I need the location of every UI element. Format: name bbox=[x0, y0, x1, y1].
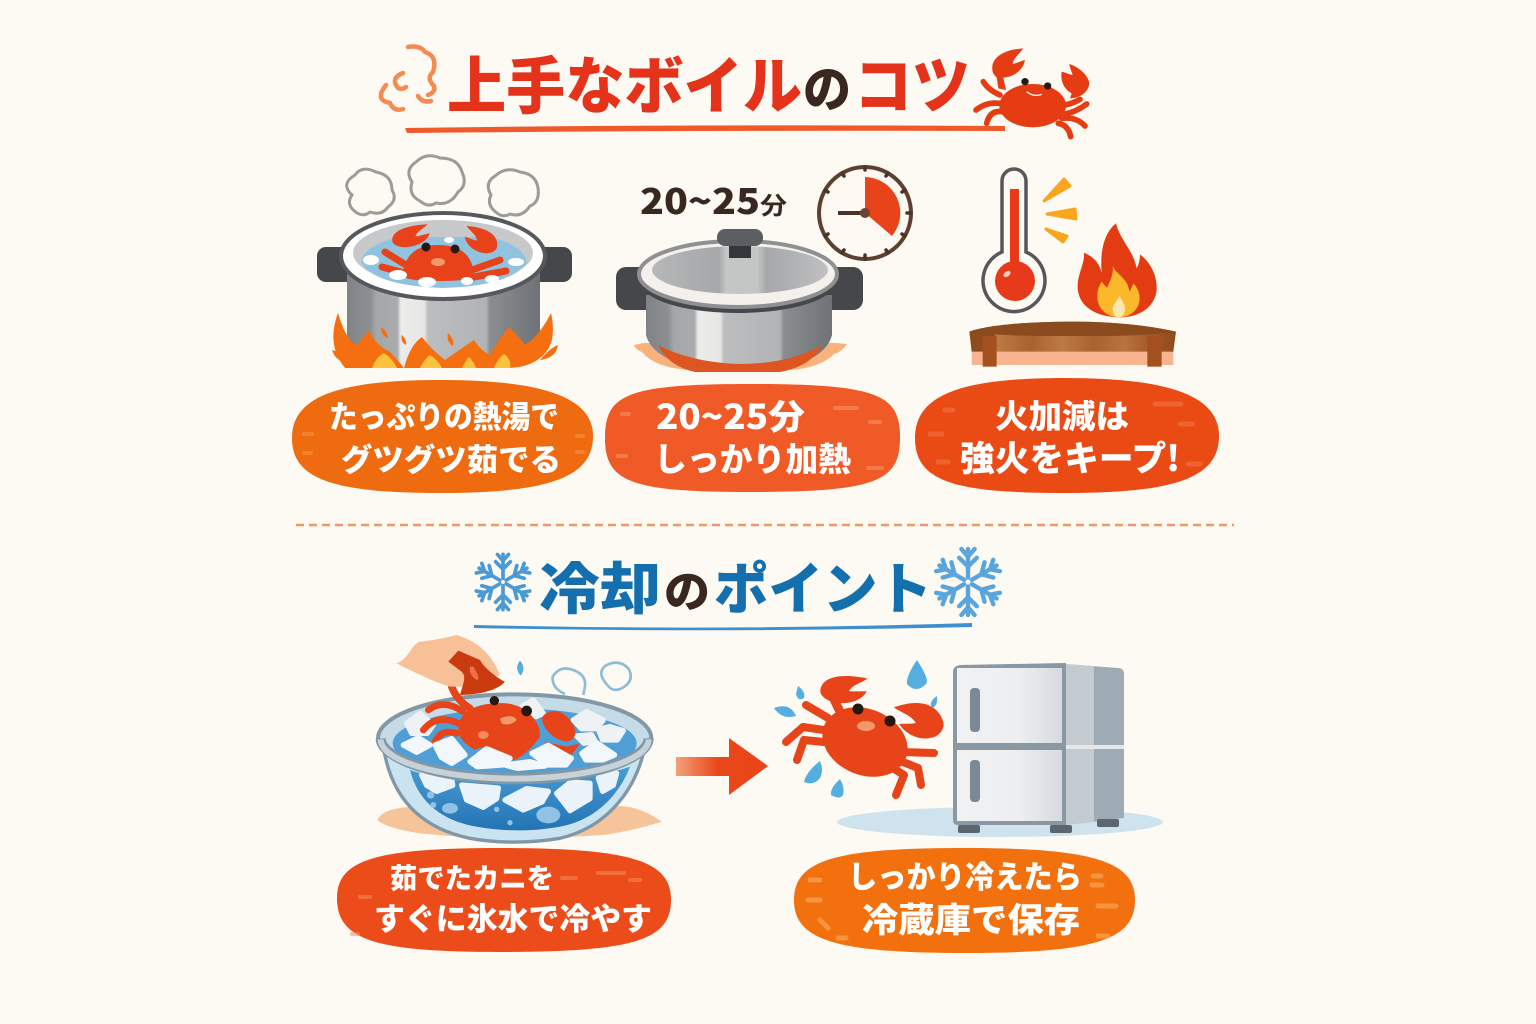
pill: store in fridge bbox=[794, 848, 1135, 953]
cutting board bbox=[969, 322, 1176, 367]
pill: keep strong heat: 火加減は bbox=[995, 390, 1129, 438]
pill: boil in hot water: グツグツ茹でる bbox=[341, 435, 561, 480]
flames bbox=[333, 313, 553, 368]
pill: keep strong heat bbox=[915, 378, 1219, 493]
back rim bbox=[378, 694, 651, 782]
heat rays bbox=[1044, 179, 1076, 242]
steam bbox=[553, 663, 631, 695]
crab in pot bbox=[382, 224, 506, 281]
drop bbox=[517, 661, 523, 676]
icon: timer clock bbox=[819, 167, 911, 259]
illustration: crab in ice bowl bbox=[377, 635, 662, 842]
pot body bbox=[347, 262, 540, 366]
icon: steam swirl beside title bbox=[381, 47, 434, 110]
cold water bbox=[410, 767, 630, 830]
heading: cooling points bbox=[539, 545, 932, 626]
illustration: boiling pot bbox=[317, 156, 572, 368]
handles bbox=[317, 247, 365, 282]
heading: cooling points: の bbox=[664, 556, 710, 620]
lid knob bbox=[717, 229, 763, 258]
heading: cooling points: ポイント bbox=[714, 545, 932, 626]
illustration: covered pot with timer bbox=[616, 229, 863, 372]
thermometer bbox=[983, 169, 1045, 312]
pill: heat 20-25 min: 20~25分 bbox=[656, 390, 805, 439]
pill: cool in ice water bbox=[337, 848, 671, 952]
handles bbox=[970, 688, 980, 732]
pill: heat 20-25 min: しっかり加熱 bbox=[654, 433, 851, 481]
feet bbox=[958, 825, 980, 833]
steam clouds bbox=[347, 156, 538, 216]
heading: boil tips: の bbox=[803, 50, 851, 122]
heading: boil tips: 上手なボイル bbox=[447, 36, 802, 126]
pill: cool in ice water: 茹でたカニを bbox=[390, 857, 554, 897]
orange shadow bbox=[377, 806, 662, 841]
heading: boil tips: コツ bbox=[854, 36, 970, 126]
foam bbox=[363, 237, 524, 287]
water drops bbox=[774, 660, 937, 798]
floor shadow bbox=[837, 807, 1163, 837]
pot body bbox=[646, 295, 832, 368]
pill: heat 20-25 min bbox=[605, 384, 900, 492]
flame bbox=[1078, 223, 1157, 317]
front rim bbox=[381, 738, 649, 778]
pill: store in fridge: しっかり冷えたら bbox=[848, 852, 1082, 897]
label: time: 20~25 分 bbox=[640, 174, 787, 225]
front panel bbox=[953, 663, 1066, 825]
ice under water bbox=[422, 773, 617, 811]
pot rim bbox=[341, 213, 545, 299]
back ice bbox=[407, 700, 623, 743]
illustration: thermometer and flame on board bbox=[969, 169, 1176, 367]
pill: cool in ice water: すぐに氷水で冷やす bbox=[374, 894, 652, 939]
crab bbox=[423, 687, 580, 761]
heading: cooling points: 冷却 bbox=[539, 545, 661, 626]
burner glow bbox=[658, 345, 822, 372]
water bbox=[361, 237, 527, 288]
illustration: wet crab bbox=[774, 660, 948, 798]
icon: crab by title bbox=[976, 48, 1089, 137]
lid rim bbox=[643, 284, 833, 313]
lid dome bbox=[652, 246, 828, 294]
icon: snowflake left bbox=[475, 554, 531, 610]
pill: boil in hot water: たっぷりの熱湯で bbox=[329, 392, 559, 437]
orange heat glow bbox=[634, 343, 847, 370]
section underline bbox=[474, 623, 972, 630]
bubbles bbox=[427, 791, 560, 825]
hand holding claw bbox=[397, 635, 505, 695]
side panel bbox=[1065, 664, 1124, 825]
pill: keep strong heat: 強火をキープ! bbox=[960, 431, 1180, 482]
title underline bbox=[405, 125, 1005, 133]
pill: store in fridge: 冷蔵庫で保存 bbox=[862, 893, 1080, 942]
bowl body bbox=[383, 747, 645, 842]
illustration: refrigerator bbox=[837, 663, 1163, 837]
pill: boil in hot water bbox=[292, 380, 593, 493]
handles bbox=[616, 267, 664, 310]
icon: snowflake right bbox=[935, 549, 1001, 615]
front ice bbox=[403, 738, 615, 768]
arrow bbox=[676, 738, 768, 795]
